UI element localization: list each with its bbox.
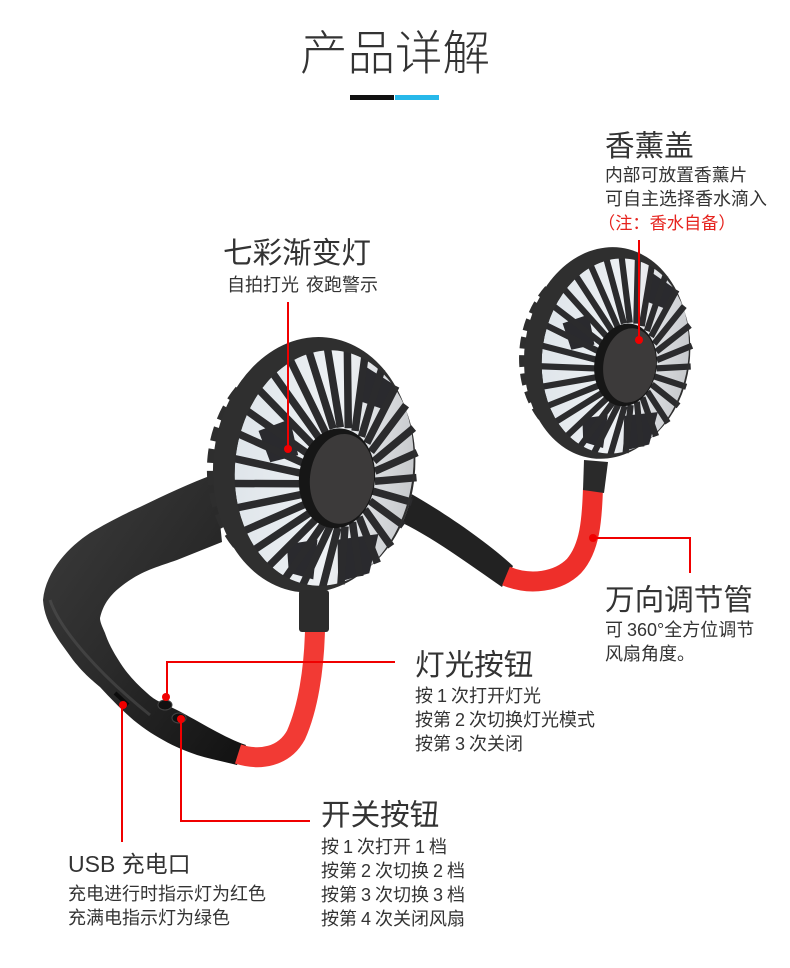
text: colour light: 夜跑警示 [306, 275, 378, 295]
callout line: aroma cover [635, 240, 643, 344]
text: aroma cover: 内部可放置香薰片 [605, 165, 747, 185]
text: aroma cover: 香薰盖 [605, 130, 694, 163]
text: light button [415, 649, 595, 754]
text: colour light: 七彩渐变灯 [223, 237, 371, 270]
text: flexible tube: 万向调节管 [605, 584, 753, 617]
text: light button: 按第 2 次切换灯光模式 [415, 710, 595, 730]
text: light button: 按 1 次打开灯光 [415, 686, 541, 706]
text: aroma cover [598, 130, 767, 233]
left flexible tube [238, 630, 315, 757]
light button [158, 700, 172, 710]
callout line: light button [162, 662, 395, 701]
text: colour light [223, 237, 378, 295]
text: USB charging port [68, 851, 266, 928]
neck band highlight [50, 600, 150, 715]
text: light button: 灯光按钮 [415, 649, 533, 682]
callout line: power switch [177, 715, 310, 821]
text: flexible tube: 可 360°全方位调节 [605, 620, 754, 640]
right fan collar [583, 460, 608, 493]
power button [172, 713, 186, 723]
neck band [43, 474, 246, 765]
text: USB charging port: 充电进行时指示灯为红色 [68, 884, 266, 904]
text: flexible tube: 风扇角度。 [605, 644, 695, 664]
title: 产品详解 [300, 28, 490, 81]
text: flexible tube [605, 584, 754, 664]
right flexible tube [506, 488, 593, 581]
text: USB charging port: 充满电指示灯为绿色 [68, 908, 230, 928]
text: power switch: 按 1 次打开 1 档 [321, 837, 447, 857]
text: power switch: 按第 3 次切换 3 档 [321, 885, 465, 905]
text: power switch [321, 799, 465, 929]
text: USB charging port: USB 充电口 [68, 851, 191, 877]
text: aroma cover: 可自主选择香水滴入 [605, 189, 767, 209]
product: neck fan [43, 236, 706, 765]
callout line: flexible tube [589, 534, 690, 573]
left fan [198, 327, 430, 603]
text: aroma cover: （注：香水自备） [598, 213, 736, 233]
left fan collar [299, 590, 329, 632]
title accent bar [350, 95, 439, 100]
text: colour light: 自拍打光 [227, 275, 299, 295]
text: power switch: 按第 4 次关闭风扇 [321, 909, 465, 929]
text: light button: 按第 3 次关闭 [415, 734, 523, 754]
callout line: colour light [284, 302, 292, 453]
text: power switch: 开关按钮 [321, 799, 439, 832]
USB port [115, 693, 128, 705]
neck band right arm [396, 492, 513, 587]
right fan [509, 236, 706, 470]
text: power switch: 按第 2 次切换 2 档 [321, 861, 465, 881]
callout line: USB port [119, 701, 127, 842]
